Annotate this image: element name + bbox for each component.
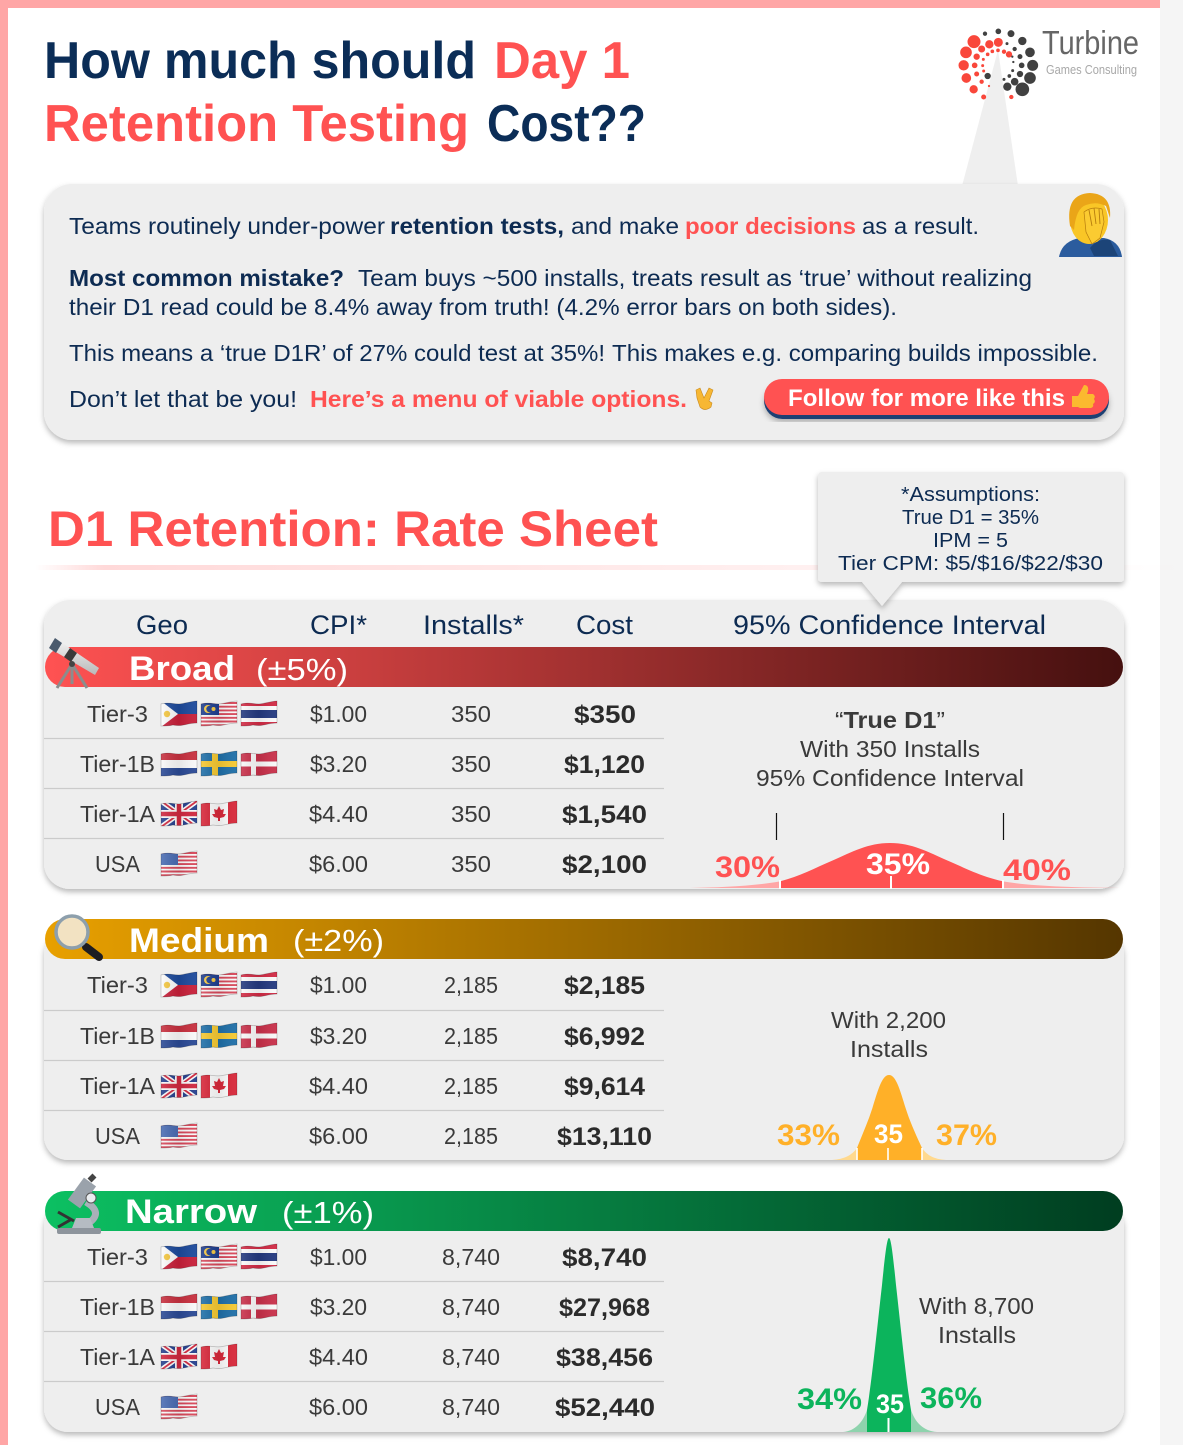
rows: Broad: [44, 701, 664, 879]
intro line 1: retention tests,: [390, 213, 564, 239]
row: Tier-1B: 350: [451, 751, 491, 777]
bar: Narrow: Narrow: [125, 1193, 258, 1231]
row: Tier-1A: $38,456: [556, 1344, 653, 1372]
row: USA: $2,100: [562, 851, 647, 879]
row: Tier-3: $2,185: [564, 972, 645, 1000]
row: Tier-1B: $27,968: [559, 1294, 650, 1322]
bar: Broad: [45, 647, 1123, 688]
intro line 2: most common mistake: Most common mistake?: [69, 265, 344, 291]
panel: Medium tier: [44, 916, 1124, 1160]
chart: Broad bell curve: [690, 813, 1120, 889]
row: Tier-1B: 8,740: [442, 1294, 500, 1320]
intro line 1: Teams routinely under-power: [69, 213, 385, 239]
row: Tier-1A: $1,540: [562, 801, 647, 829]
row: Tier-3: 350: [451, 701, 491, 727]
row: Tier-3: [87, 1244, 647, 1272]
logo: [959, 24, 1139, 99]
row: Tier-1A: $4.40: [309, 801, 368, 827]
bar: Narrow: [45, 1191, 1123, 1231]
row: USA: $6.00: [309, 1123, 368, 1149]
row: Tier-3: $1.00: [310, 972, 367, 998]
intro line 3: true D1R: [69, 340, 1098, 366]
note: true D1: With 350 Installs: [800, 736, 980, 762]
follow button: Follow for more like this: [788, 385, 1065, 412]
intro line 2: most common mistake: their D1 read could be 8.4% away from truth! (4.2% error bars on both sides).: [69, 294, 897, 320]
row: Tier-1B: [80, 751, 645, 779]
row: Tier-1B: Tier-1B: [80, 751, 155, 777]
intro panel: [44, 50, 1124, 440]
note: 2,200 installs: With 2,200: [831, 1007, 946, 1033]
row: Tier-1A: Tier-1A: [80, 1344, 156, 1370]
chart: Broad bell curve: 40%: [1003, 854, 1071, 887]
icon: telescope: [49, 638, 99, 688]
chart: Medium bell curve: 35: [874, 1119, 903, 1149]
bar: Medium: Medium: [129, 922, 269, 960]
intro line 2: most common mistake: Team buys ~500 installs, treats result as ‘true’ without realizing: [358, 265, 1032, 291]
row: USA: USA: [95, 1123, 141, 1149]
bar: Narrow: (±1%): [282, 1195, 374, 1230]
logo mark: [959, 29, 1038, 99]
row: USA: $6.00: [309, 1394, 368, 1420]
bar: Medium: [45, 919, 1123, 960]
note: true D1: 95% Confidence Interval: [756, 765, 1024, 791]
row: Tier-1B: [80, 1023, 645, 1051]
note: 2,200 installs: [831, 1007, 946, 1062]
row: Tier-1B: $3.20: [310, 1023, 367, 1049]
follow button: [764, 379, 1109, 419]
row: Tier-3: [87, 701, 636, 729]
assumptions callout: IPM = 5: [933, 529, 1008, 552]
rows: Narrow: [44, 1244, 664, 1422]
row: Tier-1A: $9,614: [564, 1073, 645, 1101]
chart: Narrow bell curve: 35: [876, 1389, 904, 1419]
row: Tier-3: $1.00: [310, 1244, 367, 1270]
row: Tier-1A: 8,740: [442, 1344, 500, 1370]
title: Retention Testing: [44, 95, 469, 153]
table header: 95% Confidence Interval: [733, 610, 1046, 640]
table header: Installs*: [423, 610, 525, 640]
row: Tier-1A: Tier-1A: [80, 1073, 156, 1099]
table header: Cost: [576, 610, 633, 640]
assumptions callout: [818, 472, 1124, 606]
title: [44, 32, 646, 153]
row: USA: USA: [95, 851, 141, 877]
row: USA: USA: [95, 1394, 141, 1420]
icon: magnifying glass: [56, 916, 99, 957]
row: Tier-1A: [80, 1073, 645, 1101]
row: Tier-1A: [80, 1344, 653, 1372]
row: USA: [95, 1123, 652, 1151]
intro line 1: and make: [571, 213, 679, 239]
chart: Medium bell curve: [777, 1075, 997, 1160]
row: USA: 8,740: [442, 1394, 500, 1420]
row: Tier-3: 2,185: [444, 972, 498, 998]
bar: Broad: Broad: [129, 650, 235, 688]
intro line 4: menu of options: [69, 386, 687, 412]
title: Day 1: [494, 32, 630, 90]
row: Tier-1B: $1,120: [564, 751, 645, 779]
row: Tier-1B: [80, 1294, 650, 1322]
title: How much should: [44, 32, 476, 90]
logo wordmark: Games Consulting: [1046, 63, 1137, 77]
rate sheet heading: D1 Retention: Rate Sheet: [48, 501, 658, 557]
row: USA: $13,110: [557, 1123, 652, 1151]
row: Tier-3: Tier-3: [87, 1244, 148, 1270]
row: Tier-3: Tier-3: [87, 972, 148, 998]
assumptions callout: *Assumptions:: [901, 483, 1040, 506]
row: Tier-3: Tier-3: [87, 701, 148, 727]
assumptions callout: True D1 = 35%: [902, 506, 1039, 529]
row: USA: [95, 851, 647, 879]
row: USA: $6.00: [309, 851, 368, 877]
assumptions callout: Tier CPM: $5/$16/$22/$30: [838, 552, 1103, 575]
note: true D1: [756, 707, 1024, 791]
chart: Medium bell curve: 33%: [777, 1119, 840, 1152]
title: Cost??: [487, 95, 646, 153]
bar: Medium: (±2%): [293, 923, 384, 958]
intro line 4: menu of options: Here’s a menu of viable options.: [310, 386, 687, 412]
chart: Broad bell curve: 35%: [866, 848, 930, 881]
intro line 1: poor decisions: [685, 213, 856, 239]
row: USA: 350: [451, 851, 491, 877]
panel: Narrow tier: [44, 1176, 1124, 1432]
row: Tier-3: $350: [574, 701, 636, 729]
note: 8,700 installs: Installs: [938, 1322, 1016, 1348]
row: Tier-1B: Tier-1B: [80, 1294, 155, 1320]
rows: Medium: [44, 972, 664, 1151]
row: Tier-1A: $4.40: [309, 1344, 368, 1370]
note: 8,700 installs: [919, 1293, 1034, 1348]
logo wordmark: [1042, 24, 1139, 77]
chart: Narrow bell curve: 36%: [920, 1382, 982, 1415]
intro line 2: most common mistake: [69, 265, 1032, 320]
table header: Geo: [136, 610, 188, 640]
table header: CPI*: [310, 610, 367, 640]
row: Tier-1A: 350: [451, 801, 491, 827]
intro line 3: true D1R: This makes e.g. comparing builds impossible.: [612, 340, 1098, 366]
row: Tier-1A: $4.40: [309, 1073, 368, 1099]
chart: Narrow bell curve: [797, 1238, 982, 1432]
chart: Narrow bell curve: 34%: [797, 1383, 862, 1416]
row: USA: 2,185: [444, 1123, 498, 1149]
note: 8,700 installs: With 8,700: [919, 1293, 1034, 1319]
row: Tier-3: $8,740: [562, 1244, 647, 1272]
chart: Broad bell curve: 30%: [715, 851, 780, 884]
row: Tier-1B: 2,185: [444, 1023, 498, 1049]
icon: victory hand: [696, 388, 713, 410]
row: Tier-1B: $6,992: [564, 1023, 645, 1051]
logo wordmark: Turbine: [1042, 24, 1139, 61]
table header: [136, 610, 1046, 640]
row: USA: $52,440: [555, 1394, 655, 1422]
chart: Medium bell curve: 37%: [936, 1119, 997, 1152]
row: Tier-1B: $3.20: [310, 1294, 367, 1320]
note: true D1: “True D1 ”: [835, 707, 945, 733]
row: Tier-3: 8,740: [442, 1244, 500, 1270]
row: Tier-1A: 2,185: [444, 1073, 498, 1099]
icon: microscope: [57, 1176, 101, 1234]
row: Tier-1B: Tier-1B: [80, 1023, 155, 1049]
row: Tier-3: [87, 972, 645, 1000]
bar: Broad: (±5%): [256, 652, 348, 687]
row: Tier-1B: $3.20: [310, 751, 367, 777]
row: Tier-1A: [80, 801, 647, 829]
row: Tier-3: $1.00: [310, 701, 367, 727]
row: Tier-1A: Tier-1A: [80, 801, 156, 827]
row: USA: [95, 1394, 655, 1422]
intro line 1: [69, 213, 979, 239]
rate sheet heading: [35, 501, 1183, 570]
note: 2,200 installs: Installs: [850, 1036, 928, 1062]
intro line 3: true D1R: This means a ‘true D1R’ of 27% could test at 35%!: [69, 340, 605, 366]
icon: thumbs up: [1072, 385, 1095, 408]
icon: facepalm: [1059, 193, 1122, 257]
panel: Broad tier: [44, 600, 1124, 889]
intro line 4: menu of options: Don’t let that be you!: [69, 386, 297, 412]
intro line 1: as a result.: [862, 213, 979, 239]
